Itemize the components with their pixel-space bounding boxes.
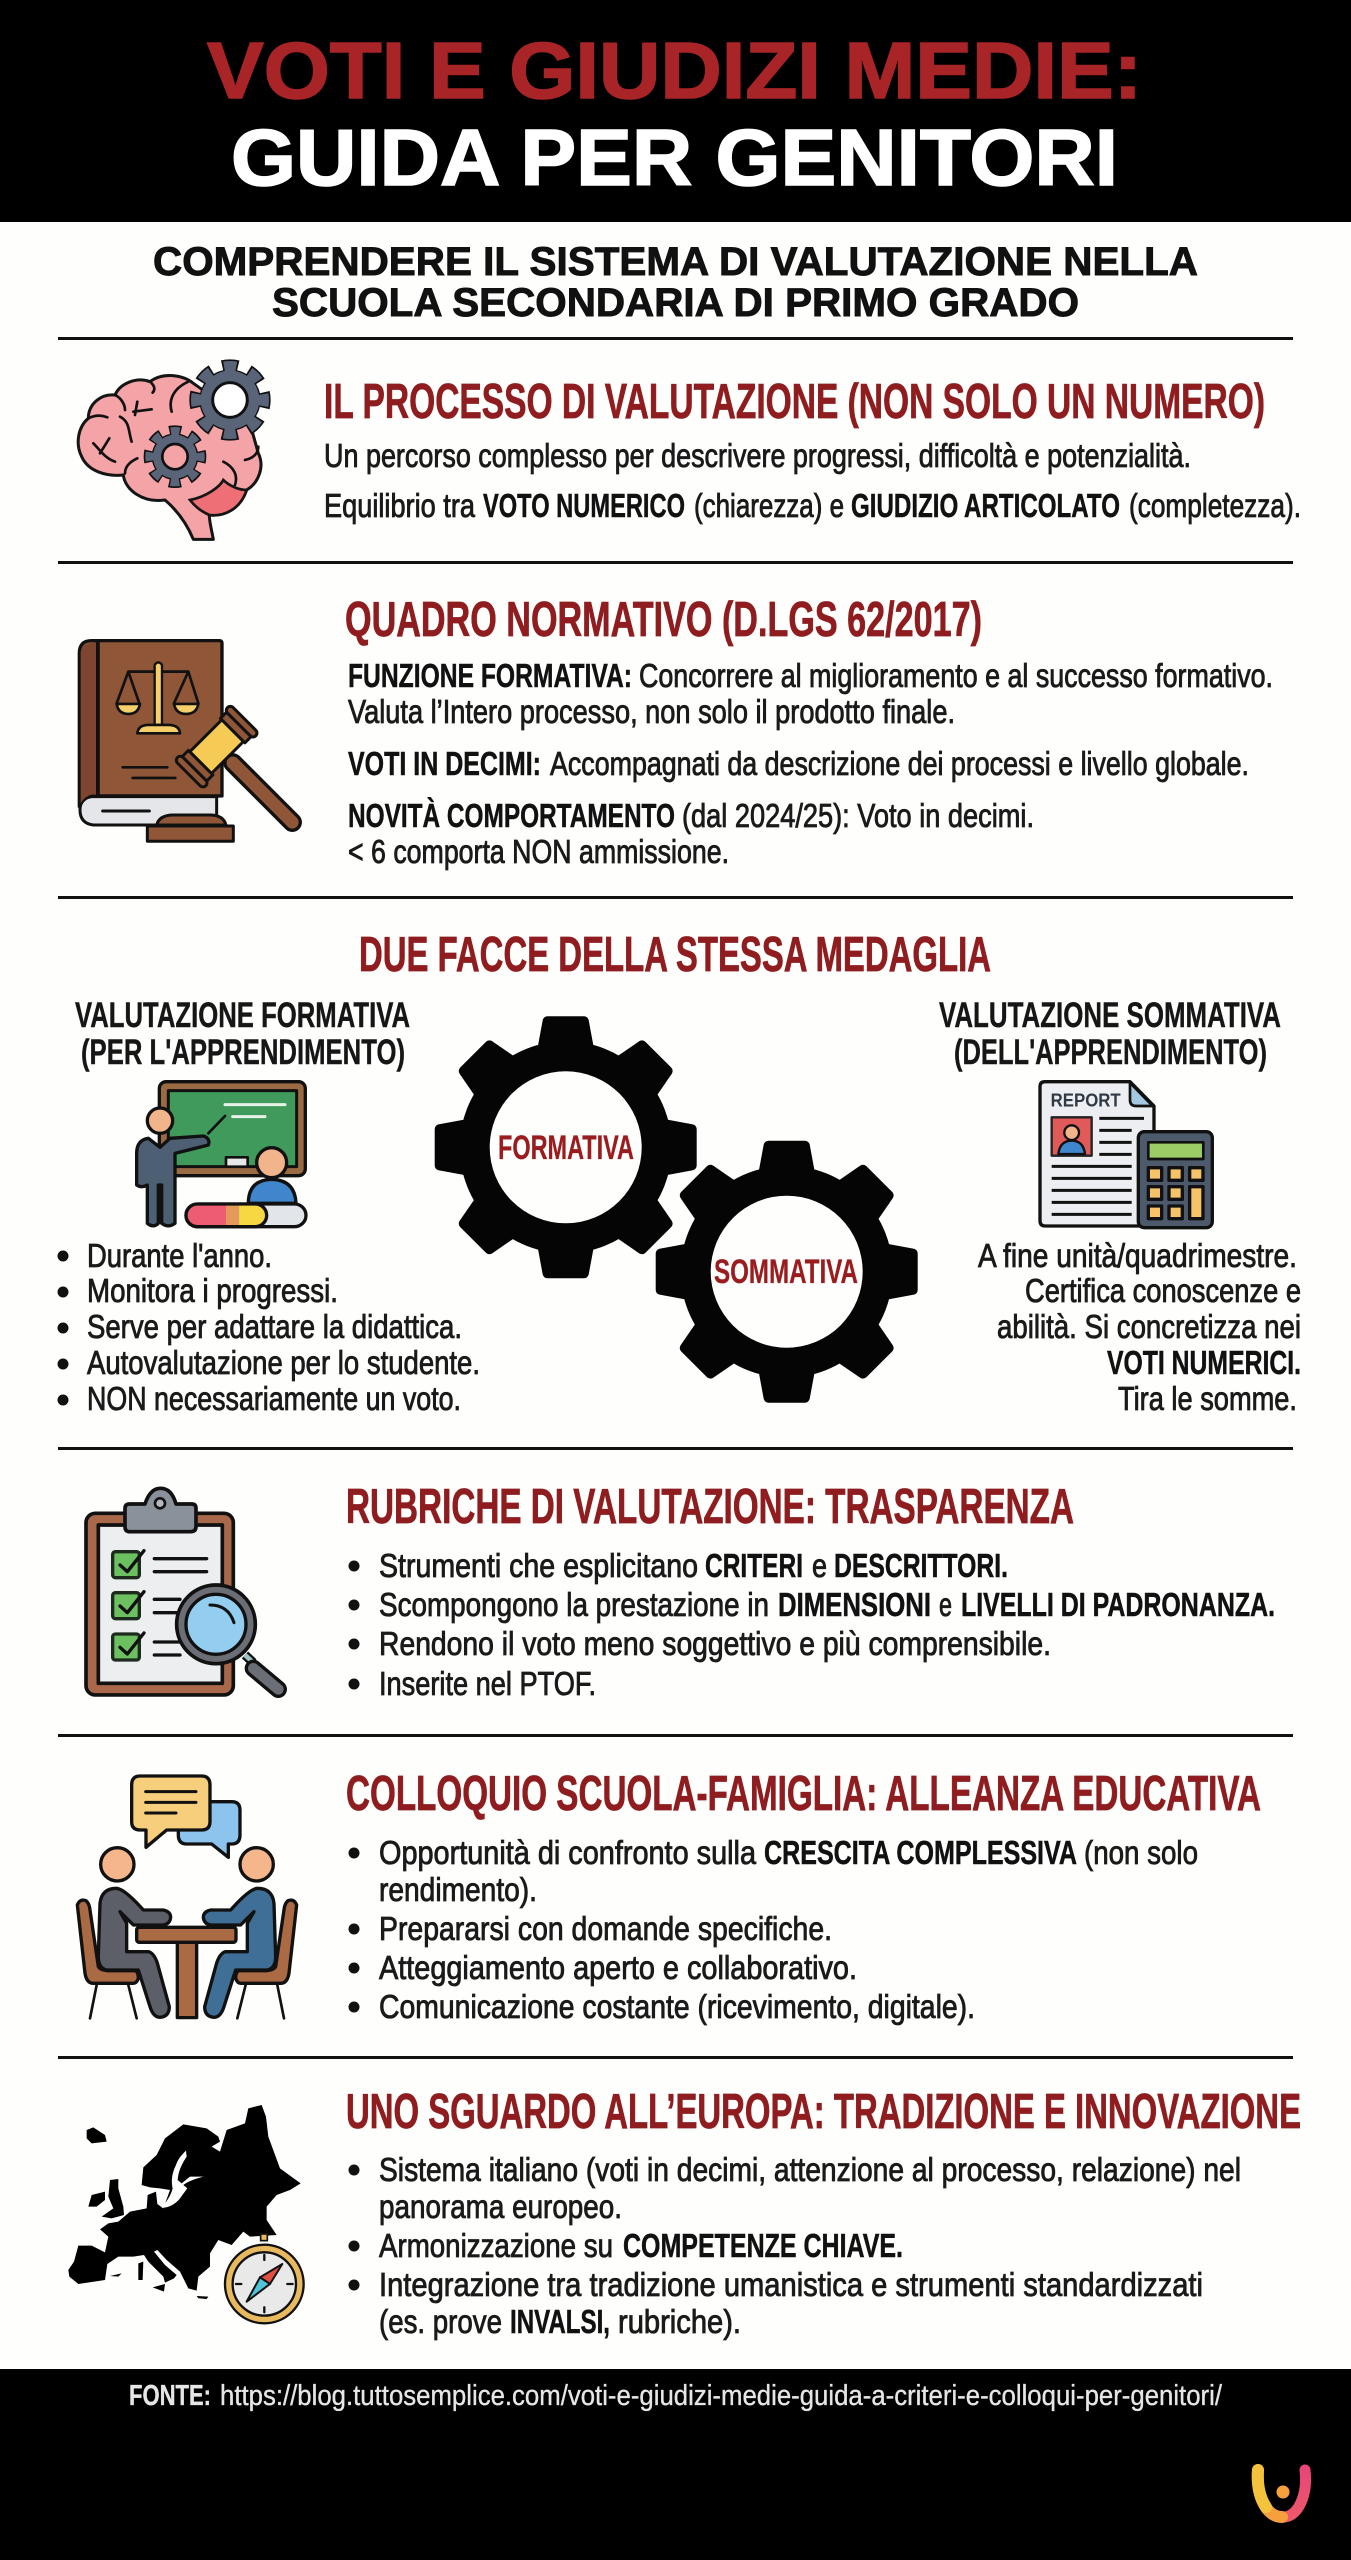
footer band	[0, 2369, 1351, 2560]
text block: Equilibrio tra	[324, 487, 476, 524]
list: DESCRITTORI.	[834, 1547, 1008, 1584]
icon: report and calculator	[1040, 1082, 1212, 1228]
gear: sommativa	[657, 1142, 917, 1402]
list: Opportunità di confronto sulla	[379, 1834, 757, 1871]
source line: https://blog.tuttosemplice.com/voti-e-giudizi-medie-guida-a-criteri-e-colloqui-per-genitori/	[220, 2380, 1223, 2412]
header band with title	[0, 0, 1351, 222]
list: Atteggiamento aperto e collaborativo.	[379, 1949, 857, 1986]
panel: rubriche di valutazione	[86, 1480, 1275, 1702]
title line 2: GUIDA PER GENITORI	[231, 113, 1118, 202]
column heading: valutazione formativa	[75, 996, 410, 1072]
text block: sommativa: Tira le somme.	[1118, 1380, 1297, 1417]
column heading: valutazione sommativa	[939, 996, 1281, 1072]
column heading: valutazione formativa: (PER L'APPRENDIMENTO)	[81, 1033, 405, 1072]
list: formativa: Durante l'anno.	[87, 1237, 272, 1274]
list: Comunicazione costante (ricevimento, digitale).	[379, 1988, 975, 2025]
list: Prepararsi con domande specifiche.	[379, 1910, 832, 1947]
text block: sommativa: A fine unità/quadrimestre.	[978, 1237, 1297, 1274]
icon: brain with gears	[78, 367, 263, 539]
list: Rendono il voto meno soggettivo e più comprensibile.	[379, 1625, 1051, 1662]
list: Armonizzazione su	[379, 2227, 613, 2264]
text block: FUNZIONE FORMATIVA:	[348, 657, 632, 694]
list: e	[939, 1586, 952, 1623]
list: formativa	[58, 1237, 480, 1417]
gear label: sommativa: SOMMATIVA	[714, 1253, 858, 1291]
text block: sommativa	[978, 1237, 1301, 1417]
list: rubriche).	[618, 2303, 741, 2340]
icon: logo	[1258, 2470, 1306, 2517]
text block: (dal 2024/25): Voto in decimi.	[682, 797, 1034, 834]
panel: uno sguardo all'Europa	[68, 2085, 1301, 2340]
subtitle: COMPRENDERE IL SISTEMA DI VALUTAZIONE NELLA	[153, 240, 1198, 284]
list: e	[812, 1547, 827, 1584]
list: Strumenti che esplicitano	[379, 1547, 698, 1584]
text block	[348, 657, 1273, 870]
list: rendimento).	[379, 1871, 537, 1908]
panel: colloquio scuola-famiglia	[77, 1767, 1261, 2025]
column heading: valutazione formativa: VALUTAZIONE FORMATIVA	[75, 996, 410, 1035]
list: (non solo	[1084, 1834, 1198, 1871]
text block	[324, 437, 1301, 524]
heading: QUADRO NORMATIVO (D.LGS 62/2017)	[345, 593, 982, 647]
icon: two people talking at a table	[77, 1776, 297, 2018]
panel: due facce della stessa medaglia	[58, 928, 1301, 1417]
list: formativa: Autovalutazione per lo studente.	[87, 1344, 480, 1381]
icon: clipboard with magnifier	[86, 1488, 278, 1695]
subtitle	[153, 240, 1198, 325]
list: Inserite nel PTOF.	[379, 1665, 596, 1702]
icon: teacher at blackboard	[137, 1082, 306, 1227]
title line 1: VOTI E GIUDIZI MEDIE:	[207, 26, 1142, 115]
list: formativa: Serve per adattare la didattica.	[87, 1308, 462, 1345]
text block: Valuta l’Intero processo, non solo il prodotto finale.	[348, 693, 955, 730]
text block: VOTO NUMERICO	[483, 487, 685, 524]
text block: (completezza).	[1129, 487, 1301, 524]
text block: sommativa: abilità. Si concretizza nei	[997, 1308, 1301, 1345]
list: COMPETENZE CHIAVE.	[623, 2227, 903, 2264]
text block: GIUDIZIO ARTICOLATO	[851, 487, 1120, 524]
list	[348, 2151, 1241, 2340]
panel: il processo di valutazione	[78, 367, 1301, 539]
gear: formativa	[436, 1017, 696, 1277]
source line: FONTE:	[129, 2380, 211, 2412]
list: panorama europeo.	[379, 2188, 622, 2225]
heading: DUE FACCE DELLA STESSA MEDAGLIA	[359, 928, 991, 982]
text block: sommativa: Certifica conoscenze e	[1025, 1272, 1301, 1309]
list: Scompongono la prestazione in	[379, 1586, 769, 1623]
text block: VOTI IN DECIMI:	[348, 745, 541, 782]
list: CRITERI	[705, 1547, 803, 1584]
list: DIMENSIONI	[778, 1586, 931, 1623]
list: (es. prove	[379, 2303, 502, 2340]
subtitle: SCUOLA SECONDARIA DI PRIMO GRADO	[272, 281, 1079, 325]
list	[348, 1547, 1275, 1702]
icon: report and calculator: REPORT	[1051, 1090, 1121, 1111]
text block: NOVITÀ COMPORTAMENTO	[348, 797, 675, 834]
icon: map of Europe with compass	[68, 2105, 304, 2323]
list: Integrazione tra tradizione umanistica e strumenti standardizzati	[379, 2266, 1203, 2303]
gear label: formativa: FORMATIVA	[498, 1129, 634, 1167]
list: formativa: Monitora i progressi.	[87, 1272, 338, 1309]
text block: (chiarezza) e	[694, 487, 844, 524]
list: INVALSI,	[510, 2303, 610, 2340]
list: formativa: NON necessariamente un voto.	[87, 1380, 461, 1417]
text block: < 6 comporta NON ammissione.	[348, 833, 729, 870]
icon: law book with gavel	[79, 641, 326, 856]
panel: quadro normativo	[79, 593, 1273, 870]
list	[348, 1834, 1198, 2025]
list: CRESCITA COMPLESSIVA	[764, 1834, 1077, 1871]
